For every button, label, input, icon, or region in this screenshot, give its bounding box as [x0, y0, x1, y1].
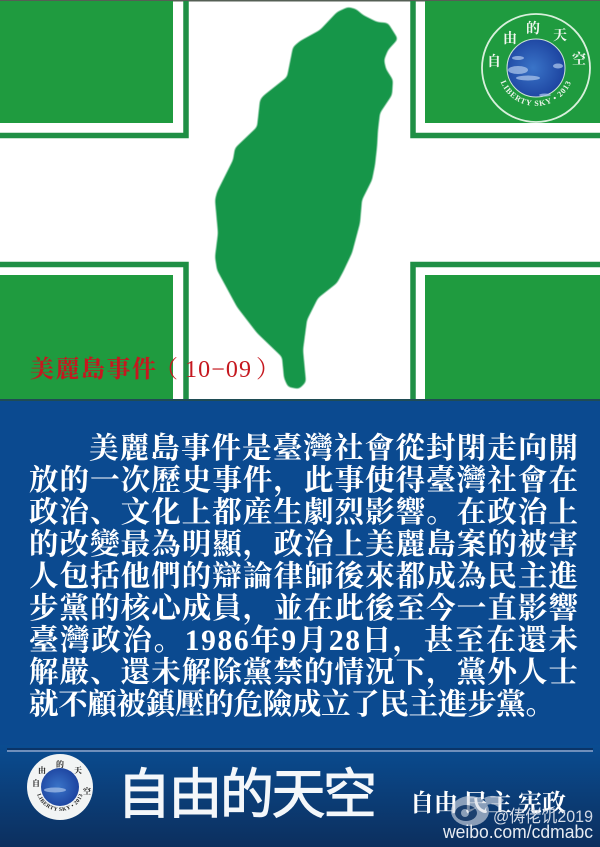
text block: body: 就不顧被鎮壓的危險成立了民主進步黨。: [29, 688, 555, 721]
flag corner: bottom right: [413, 264, 600, 400]
panel: flag background: [0, 0, 600, 400]
slogan: 自由 民主 宪政: [410, 789, 566, 817]
text block: body: 臺灣政治。1986年9月28日，甚至在還未: [29, 624, 578, 658]
flag corner: bottom left: [0, 264, 186, 400]
title: 10−09: [185, 357, 251, 383]
watermark: user handle: @俦佬饥2019: [493, 807, 593, 826]
text block: body: 放的一次歷史事件，此事使得臺灣社會在: [29, 464, 578, 498]
logo calligraphy: 自: [487, 53, 501, 70]
logo calligraphy: 的: [526, 21, 540, 37]
watermark: url: weibo.com/cdmabc: [442, 822, 593, 842]
logo: Liberty Sky badge: [481, 13, 591, 123]
text block: body: 人包括他們的辯論律師後來都成為民主進: [29, 560, 578, 593]
map: Taiwan island: [215, 7, 398, 389]
logo: footer badge: 天: [74, 766, 82, 775]
logo: footer badge: [27, 754, 93, 820]
logo calligraphy: 空: [572, 51, 586, 68]
text block: body: [29, 432, 578, 721]
logo motto: LIBERTY SKY • 2013: [500, 80, 570, 106]
logo: footer badge: LIBERTY SKY • 2013: [37, 793, 82, 811]
panel: description: [0, 399, 600, 745]
logo: footer badge: 自: [32, 778, 40, 788]
logo calligraphy: 由: [503, 30, 517, 47]
panel: footer: [0, 745, 600, 847]
logo calligraphy: [487, 21, 586, 70]
text block: body: 的改變最為明顯，政治上美麗島案的被害: [29, 527, 578, 562]
title: ）: [256, 357, 280, 383]
title: （: [154, 357, 178, 383]
text block: body: 政治、文化上都産生劇烈影響。在政治上: [29, 496, 578, 529]
text block: body: 美麗島事件是臺灣社會從封閉走向開: [89, 432, 578, 465]
logo calligraphy: 天: [553, 28, 567, 44]
title: [30, 355, 280, 383]
logo: footer badge: 的: [56, 759, 64, 769]
text block: body: 解嚴、還未解除黨禁的情況下，黨外人士: [29, 656, 578, 690]
title: 美麗島事件: [30, 355, 156, 383]
icon: weibo watermark: [451, 796, 504, 826]
flag corner: top right: [413, 1, 600, 136]
flag corner: top left: [0, 1, 186, 136]
logo: footer badge: 空: [83, 786, 91, 796]
text block: body: 步黨的核心成員，並在此後至今一直影響: [29, 592, 578, 626]
logo: footer badge: 由: [38, 765, 46, 775]
calligraphy: site name: 自由的天空: [117, 765, 377, 825]
logo clouds: [508, 56, 563, 96]
